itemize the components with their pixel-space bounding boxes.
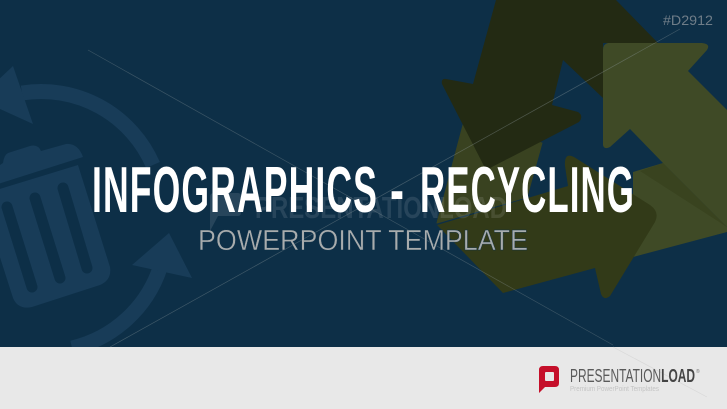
icon: trash can with circular arrows xyxy=(0,66,192,348)
subtitle: POWERPOINT TEMPLATE xyxy=(198,225,528,257)
watermark diagonal lines xyxy=(88,29,707,397)
icon: logo speech bubble xyxy=(539,366,559,393)
icon: recycling triangle arrows xyxy=(437,0,727,298)
upper circular arrow xyxy=(0,66,153,165)
lower circular arrow xyxy=(72,233,192,348)
footer logo xyxy=(539,365,700,393)
watermark logo: PRESENTATIONLOAD xyxy=(255,190,507,225)
registered mark: ® xyxy=(696,368,700,375)
trash body xyxy=(0,165,110,308)
logo tagline: Premium PowerPoint Templates xyxy=(570,384,659,393)
title: INFOGRAPHICS xyxy=(92,153,378,226)
product code: #D2912 xyxy=(663,13,713,28)
footer band xyxy=(0,347,727,409)
title: - xyxy=(390,153,404,226)
watermark logo xyxy=(210,190,507,231)
logo wordmark: PRESENTATIONLOAD xyxy=(570,365,695,386)
trash lid xyxy=(0,144,83,184)
trash slots xyxy=(7,188,87,287)
